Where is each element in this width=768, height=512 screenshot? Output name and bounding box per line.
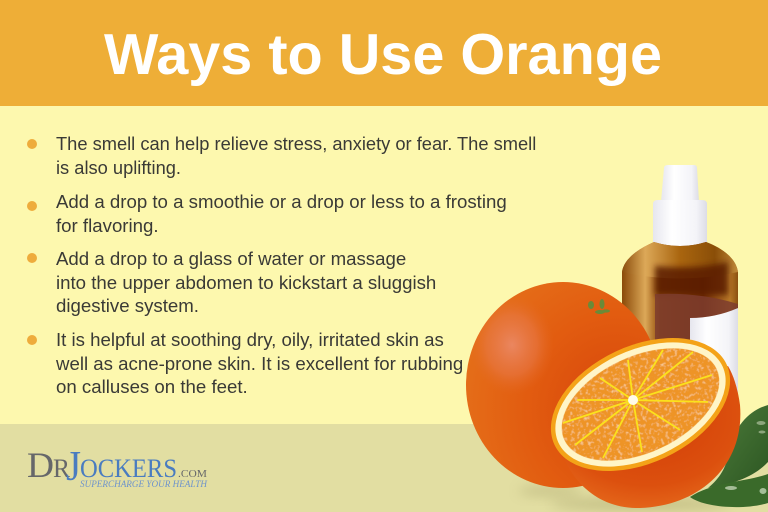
header band (0, 0, 768, 106)
title: Ways to Use Orange (104, 23, 662, 87)
illustration: oil bottle, oranges, leaves (466, 165, 768, 512)
orange core (628, 395, 638, 405)
bullet 4: It is helpful at soothing dry, oily, irritated skin as (56, 329, 444, 350)
icon: essential oil bottle (622, 165, 738, 393)
logo (27, 445, 208, 490)
bullet 2: Add a drop to a smoothie or a drop or less to a frosting (56, 191, 507, 212)
bullet 1: The smell can help relieve stress, anxiety or fear. The smell (56, 133, 536, 154)
bullet 4 (27, 329, 463, 397)
orange segment lines (563, 350, 712, 458)
logo wordmark (27, 444, 207, 490)
footer band (0, 424, 768, 512)
icon: cut orange half (530, 311, 751, 508)
logo wordmark: J (66, 445, 81, 490)
bullet 1: is also uplifting. (56, 156, 181, 178)
bullet 1 (27, 133, 536, 178)
logo tagline: SUPERCHARGE YOUR HEALTH (80, 479, 208, 489)
bullet 4: well as acne-prone skin. It is excellent for rubbing (56, 352, 463, 374)
bullet 2 (27, 191, 507, 236)
icon: leaves (690, 405, 768, 507)
logo wordmark: OCKERS (80, 454, 177, 483)
bullet 4: on calluses on the feet. (56, 376, 248, 397)
bullet 3: into the upper abdomen to kickstart a sluggish (56, 272, 436, 292)
logo wordmark: D (27, 445, 54, 485)
table shadow (518, 486, 730, 510)
bullet 2: for flavoring. (56, 214, 159, 236)
orange stem (588, 299, 610, 314)
logo wordmark: R (53, 454, 71, 483)
logo wordmark: .COM (178, 469, 207, 480)
icon: whole orange (466, 282, 660, 488)
bullet 3: Add a drop to a glass of water or massage (56, 248, 406, 269)
bullet 3 (27, 248, 436, 316)
bullet 3: digestive system. (56, 295, 199, 316)
